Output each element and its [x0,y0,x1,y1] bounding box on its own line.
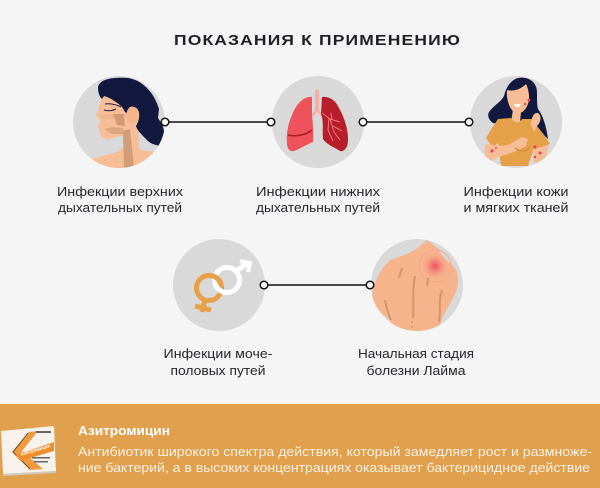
label: urogenital: Инфекции моче- [164,347,272,361]
title: ПОКАЗАНИЯ К ПРИМЕНЕНИЮ [174,32,461,49]
label: urogenital [164,347,272,378]
icon: lungs [272,76,364,168]
label: upper respiratory: Инфекции верхних [57,185,184,199]
banner heading: Азитромицин [78,424,170,438]
icon: medicine box: Азитромицин [20,443,51,458]
label: lower respiratory: Инфекции нижних [256,185,381,199]
label: skin [464,185,569,215]
label: lower respiratory: дыхательных путей [256,201,380,215]
label: Lyme [358,347,474,378]
label: skin: Инфекции кожи [464,185,569,199]
label: urogenital: половых путей [170,364,266,378]
label: upper respiratory [57,185,184,215]
icon: medicine box [1,426,56,476]
connector: top left [161,118,275,126]
icon: woman with rash [470,76,562,168]
banner [0,404,600,488]
label: skin: и мягких тканей [464,201,569,215]
label: upper respiratory: дыхательных путей [58,201,182,215]
icon: back with shoulder pain [371,239,463,332]
label: Lyme: Начальная стадия [358,347,474,361]
banner text [78,445,592,475]
label: Lyme: болезни Лайма [366,364,466,378]
banner text: Антибиотик широкого спектра действия, который замедляет рост и размноже- [78,445,592,459]
connector: top right [359,118,473,126]
icon: gender symbols [173,239,265,331]
icon: head with airways [73,76,165,170]
label: lower respiratory [256,185,381,215]
banner text: ние бактерий, а в высоких концентрациях оказывает бактерицидное действие [78,461,590,475]
connector: bottom [260,281,374,289]
